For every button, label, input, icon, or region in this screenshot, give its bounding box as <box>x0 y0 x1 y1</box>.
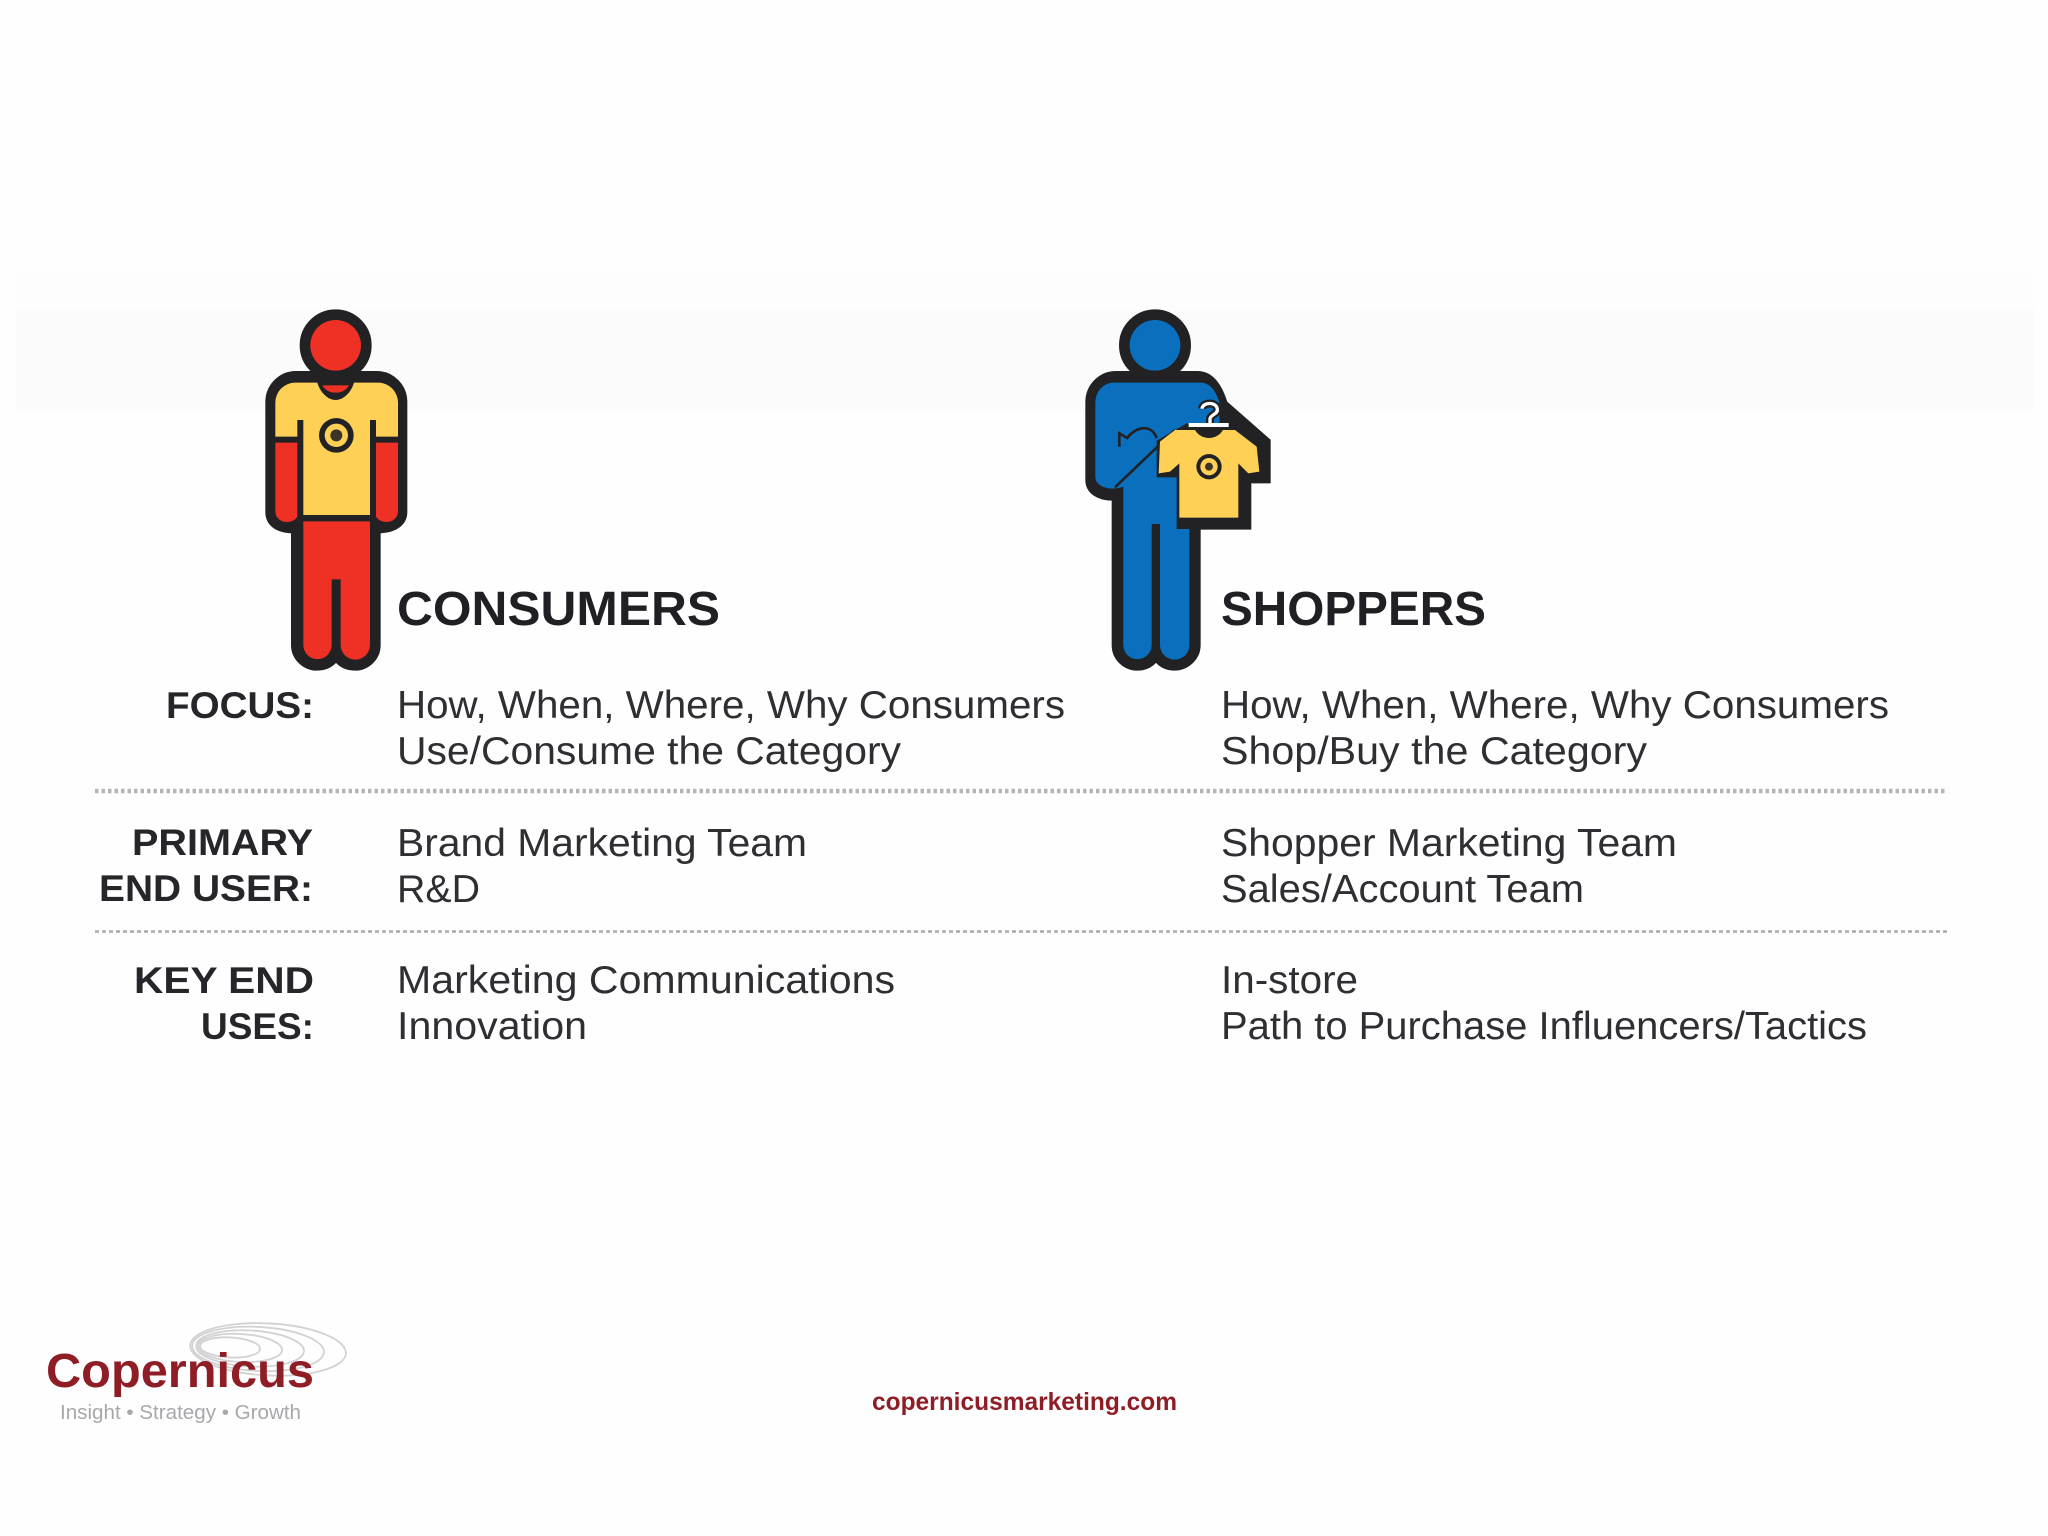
shoppers key uses text: In-store <box>1221 959 1358 1002</box>
consumers end user text <box>397 822 807 911</box>
label: key end uses: USES: <box>201 1006 314 1047</box>
logo tagline: Insight • Strategy • Growth <box>60 1402 301 1424</box>
consumers end user text: R&D <box>397 868 480 911</box>
row: focus <box>166 684 1889 773</box>
shirt <box>275 383 398 515</box>
logo wordmark: Copernicus <box>46 1345 314 1398</box>
right arm <box>376 443 398 522</box>
hanger outline <box>1202 403 1217 425</box>
yellow t-shirt <box>1159 430 1259 518</box>
shoppers end user text: Shopper Marketing Team <box>1221 822 1677 865</box>
neck <box>322 385 349 393</box>
shoppers focus text <box>1221 684 1889 773</box>
shoppers key uses text: Path to Purchase Influencers/Tactics <box>1221 1005 1867 1048</box>
consumers focus text: Use/Consume the Category <box>397 730 902 773</box>
consumers key uses text <box>397 959 895 1048</box>
heading: consumers: CONSUMERS <box>397 583 720 636</box>
label: primary end user: END USER: <box>99 868 313 909</box>
consumers end user text: Brand Marketing Team <box>397 822 807 865</box>
logo: Copernicus <box>46 1319 347 1424</box>
hanger <box>1202 403 1217 425</box>
head <box>310 320 361 371</box>
logo orbit rings <box>189 1319 347 1379</box>
left arm <box>275 443 297 522</box>
body and legs <box>1095 383 1220 660</box>
consumers focus text: How, When, Where, Why Consumers <box>397 684 1065 727</box>
heading: shoppers: SHOPPERS <box>1221 583 1486 636</box>
website url: copernicusmarketing.com <box>872 1388 1177 1416</box>
row: primary end user <box>99 822 1677 911</box>
icon: shopper figure with hanger shirt <box>1086 310 1270 670</box>
shirt outline <box>1157 405 1270 529</box>
forearm line <box>1119 428 1157 447</box>
figure outline <box>1086 310 1270 670</box>
icon: consumer figure <box>266 310 407 670</box>
consumers focus text <box>397 684 1065 773</box>
trousers <box>303 521 370 660</box>
label: primary end user: PRIMARY <box>132 822 313 863</box>
figure outline <box>266 310 407 670</box>
row: key end uses <box>134 959 1867 1048</box>
label: key end uses <box>134 960 314 1047</box>
consumers key uses text: Innovation <box>397 1005 587 1048</box>
label: focus: FOCUS: <box>166 685 314 726</box>
shoppers end user text: Sales/Account Team <box>1221 868 1584 911</box>
shoppers key uses text <box>1221 959 1867 1048</box>
shoppers focus text: Shop/Buy the Category <box>1221 730 1648 773</box>
label: primary end user <box>99 822 313 909</box>
shirt target <box>319 418 354 453</box>
label: key end uses: KEY END <box>134 960 314 1001</box>
head <box>1130 320 1180 371</box>
consumers key uses text: Marketing Communications <box>397 959 895 1002</box>
shoppers end user text <box>1221 822 1677 911</box>
t-shirt target <box>1196 454 1222 479</box>
shoppers focus text: How, When, Where, Why Consumers <box>1221 684 1889 727</box>
